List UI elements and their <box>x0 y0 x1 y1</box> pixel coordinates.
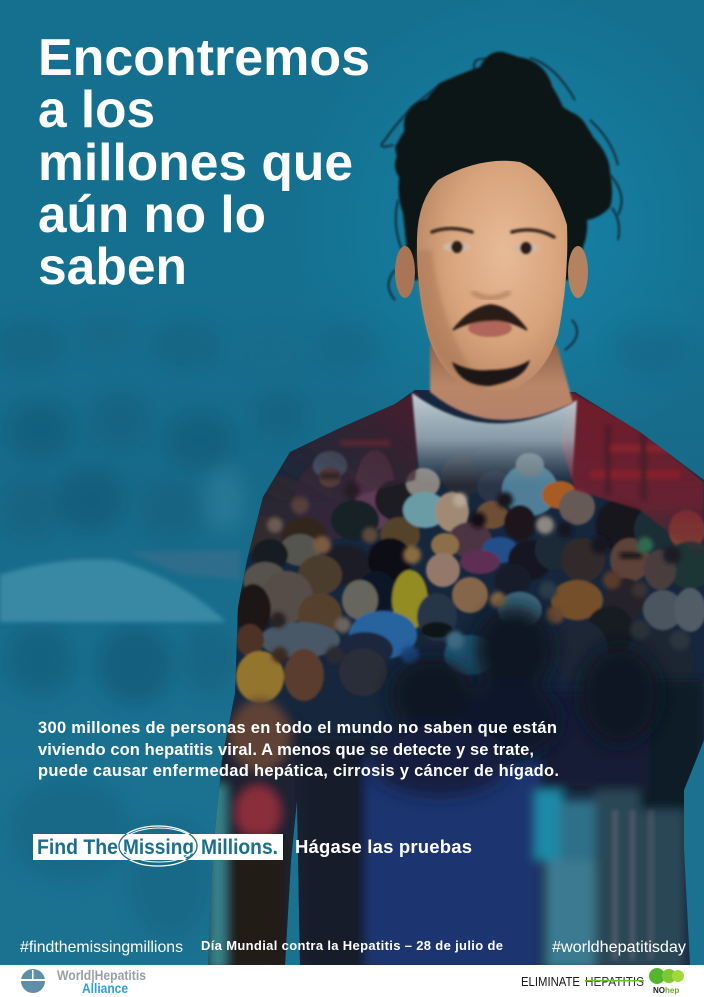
plaid stripes <box>612 810 654 960</box>
market umbrella <box>0 550 240 622</box>
logo: World Hepatitis Alliance <box>21 967 146 996</box>
lower blurred figures <box>208 680 704 970</box>
campaign logo: Find The Missing Millions: Millions. <box>201 836 278 859</box>
ears <box>395 246 588 298</box>
footer band <box>0 965 704 997</box>
title: Encontremos <box>38 28 370 86</box>
hair curls <box>381 58 622 350</box>
campaign logo: Find The Missing Millions: Find The <box>37 836 118 859</box>
title: a los <box>38 80 155 138</box>
hashtag left: #findthemissingmillions <box>20 939 183 956</box>
description text: viviendo con hepatitis viral. A menos que se detecte y se trate, <box>38 741 534 759</box>
logo: World Hepatitis Alliance: World|Hepatitis <box>57 967 146 983</box>
lips <box>468 319 512 337</box>
title <box>38 28 370 295</box>
shirt left <box>283 392 420 495</box>
crowd heads <box>235 446 704 703</box>
description text <box>38 719 559 780</box>
face <box>417 161 567 391</box>
campaign logo: Find The Missing Millions <box>33 826 283 866</box>
description text: puede causar enfermedad hepática, cirrosis y cáncer de hígado. <box>38 762 559 780</box>
title: saben <box>38 237 187 295</box>
background halo <box>290 0 704 470</box>
logo: Eliminate Hepatitis <box>521 974 644 989</box>
eyes <box>443 241 539 254</box>
moustache <box>453 305 527 330</box>
plaid checks <box>340 425 680 500</box>
hashtag right: #worldhepatitisday <box>552 939 686 956</box>
logo: NOhep: NOhep <box>653 986 679 995</box>
eyebrows <box>432 228 554 237</box>
logo: World Hepatitis Alliance: Alliance <box>82 980 128 996</box>
campaign logo: Find The Missing Millions: Missing <box>123 836 194 859</box>
nose <box>472 292 510 298</box>
shirt right <box>560 392 704 560</box>
title: millones que <box>38 133 353 191</box>
goatee <box>452 360 530 386</box>
hair mass <box>395 52 612 280</box>
world hepatitis day line: Día Mundial contra la Hepatitis – 28 de julio de <box>201 938 503 953</box>
figure: body filled with crowd <box>200 390 704 970</box>
description text: 300 millones de personas en todo el mundo no saben que están <box>38 719 557 737</box>
background crowd <box>0 313 688 940</box>
cheek shadow <box>417 250 485 390</box>
logo: NOhep <box>649 968 684 995</box>
neck <box>430 345 573 420</box>
t-shirt <box>412 393 577 485</box>
logo: Eliminate Hepatitis: ELIMINATE <box>521 974 580 989</box>
call to action: Hágase las pruebas <box>295 836 472 857</box>
crowd small details <box>267 474 690 664</box>
blurred heads in foreground <box>370 606 660 796</box>
crowd base <box>200 390 704 970</box>
title: aún no lo <box>38 185 266 243</box>
logo: Eliminate Hepatitis: HEPATITIS <box>585 974 644 989</box>
